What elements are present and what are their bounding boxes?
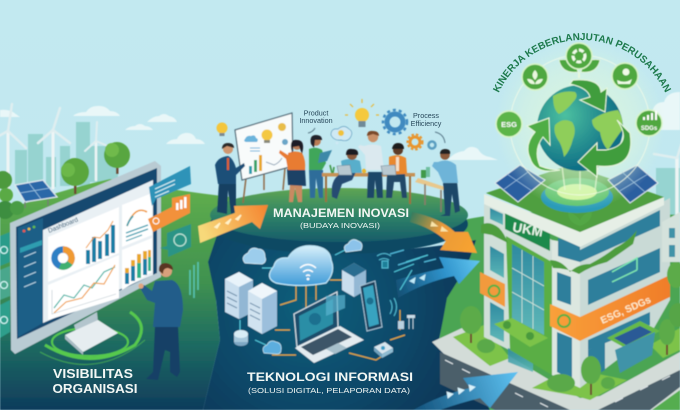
label: product innovation: Innovation — [299, 116, 333, 125]
platform — [210, 188, 468, 254]
server right — [342, 263, 366, 297]
badge SDGs — [636, 110, 662, 136]
side table and person — [415, 149, 460, 216]
windows right — [557, 210, 660, 380]
blue gear — [383, 110, 407, 134]
corner face — [552, 240, 580, 388]
solar panel left — [15, 180, 57, 208]
tree 2 — [104, 142, 130, 174]
light beams — [560, 150, 600, 190]
tree a — [460, 306, 482, 343]
badge ESG — [496, 111, 522, 137]
monitor — [10, 161, 161, 355]
heading: manajemen inovasi: MANAJEMEN INOVASI — [273, 206, 409, 220]
person: woman green — [309, 135, 332, 198]
table — [322, 131, 415, 204]
monitor green rings — [40, 312, 145, 364]
phone — [360, 281, 382, 331]
green tower — [506, 236, 552, 375]
label: product innovation: Product — [304, 108, 328, 118]
donut chart — [54, 249, 72, 267]
tree c — [659, 319, 675, 355]
person: presenter man — [215, 143, 245, 214]
data streaks — [190, 262, 198, 298]
heading: visibilitas organisasi — [52, 367, 138, 396]
skyline left — [15, 122, 118, 187]
street trees — [460, 262, 680, 395]
server middle — [248, 283, 277, 334]
orange band left — [480, 272, 505, 307]
badge leaf — [522, 64, 548, 90]
stand — [65, 312, 118, 355]
roof green — [486, 165, 664, 232]
right face — [580, 198, 670, 388]
sprout — [559, 60, 600, 78]
teal card — [160, 224, 191, 257]
laptop 1 — [337, 165, 352, 175]
wifi and signal icons — [377, 254, 396, 316]
panel line chart — [48, 255, 119, 320]
database — [234, 330, 248, 346]
orange arrow right — [410, 212, 477, 253]
rooftop plant — [568, 212, 592, 226]
person: seated orange — [386, 143, 407, 198]
side building right — [662, 212, 680, 262]
center dark blob — [203, 232, 490, 410]
person: seated woman — [332, 149, 362, 199]
curved title: KINERJA KEBERLANJUTAN PERUSAHAAN — [492, 33, 672, 92]
heading: teknologi informasi: TEKNOLOGI INFORMASI — [247, 370, 413, 384]
badge hand coin — [612, 63, 638, 89]
thought bubble bulb — [331, 126, 352, 144]
globe — [537, 85, 623, 171]
blue arrow lower — [413, 372, 518, 410]
glow platform — [541, 178, 613, 213]
building — [480, 165, 670, 388]
windows left — [490, 208, 533, 372]
screen — [16, 168, 157, 339]
turbine 3 — [85, 122, 110, 180]
continents — [553, 92, 622, 157]
label: product innovation — [299, 108, 333, 125]
heading: visibilitas organisasi: VISIBILITAS — [53, 367, 133, 381]
skyline right — [656, 168, 680, 218]
server left — [225, 272, 253, 319]
sidewalk and road — [432, 328, 680, 410]
left face — [484, 200, 552, 372]
sensor poles — [398, 315, 415, 329]
hub device — [374, 342, 393, 358]
lawn patches — [453, 325, 680, 400]
innovation icons — [216, 99, 445, 150]
person: standing man white shirt — [358, 131, 384, 198]
vines — [481, 223, 637, 274]
clouds — [0, 92, 680, 160]
panel donut and bars — [48, 207, 119, 282]
label: process efficiency: Process — [413, 111, 439, 120]
floating cards — [148, 166, 191, 257]
bulb left — [216, 122, 228, 136]
solar panel roof left — [495, 165, 545, 202]
badge ESG: ESG — [501, 120, 517, 129]
heading: manajemen inovasi: (BUDAYA INOVASI) — [300, 221, 381, 230]
cloud large — [269, 246, 333, 286]
orange arrow left — [198, 205, 268, 243]
UKM sign — [505, 208, 550, 251]
wind turbines — [0, 104, 680, 222]
turbine 1 — [0, 104, 26, 190]
roof parapet — [484, 194, 664, 247]
orange band right — [550, 275, 670, 341]
turbine 4 — [654, 136, 680, 222]
heading: manajemen inovasi — [273, 206, 409, 230]
recycle arrows — [527, 80, 631, 177]
small blue gear — [428, 142, 436, 148]
cloud small right — [344, 240, 362, 252]
laptop 2 — [381, 165, 396, 175]
halo — [495, 40, 665, 210]
person: woman orange — [279, 140, 306, 202]
cloud small left — [243, 248, 266, 264]
solar panel roof right — [608, 165, 658, 203]
label: process efficiency — [411, 111, 442, 128]
dashboard label: Dashboard — [47, 216, 80, 235]
UKM sign: UKM — [511, 220, 544, 240]
tree 1 — [61, 158, 89, 194]
heading: teknologi informasi: (SOLUSI DIGITAL, PELAPORAN DATA) — [248, 386, 411, 395]
panel stacked bars — [122, 238, 152, 290]
left bushes and trees — [0, 142, 130, 219]
orange gear — [408, 134, 422, 150]
bezel — [10, 161, 161, 354]
side cards — [0, 232, 10, 338]
left hill ground — [0, 179, 250, 410]
sustainability globe group — [495, 40, 665, 210]
big bulb — [345, 99, 379, 127]
heading: visibilitas organisasi: ORGANISASI — [52, 382, 138, 396]
orange card — [148, 194, 190, 232]
band text: ESG, SDGs — [599, 295, 653, 327]
label: process efficiency: Efficiency — [411, 119, 442, 128]
entrance canopy — [607, 321, 660, 373]
tree d — [667, 262, 680, 327]
turbine 2 — [38, 108, 70, 188]
tree b — [581, 356, 601, 395]
dashboard — [43, 180, 153, 323]
badge recycle — [566, 43, 592, 69]
right ground — [430, 211, 680, 410]
businessman at monitor — [138, 263, 183, 380]
shrubs — [477, 339, 495, 353]
blue arrow upper — [390, 250, 480, 298]
flip chart — [235, 113, 293, 203]
blue card — [149, 166, 191, 206]
balcony — [494, 318, 548, 347]
badge SDGs: SDGs — [641, 126, 658, 132]
upload cloud — [263, 341, 281, 354]
orbit ring — [510, 55, 650, 195]
panel gauge — [122, 193, 152, 247]
bar chart — [86, 225, 115, 264]
heading: teknologi informasi — [247, 370, 413, 395]
laptop — [294, 292, 364, 363]
tech connectors — [240, 250, 428, 360]
green glow overlay — [612, 258, 637, 282]
